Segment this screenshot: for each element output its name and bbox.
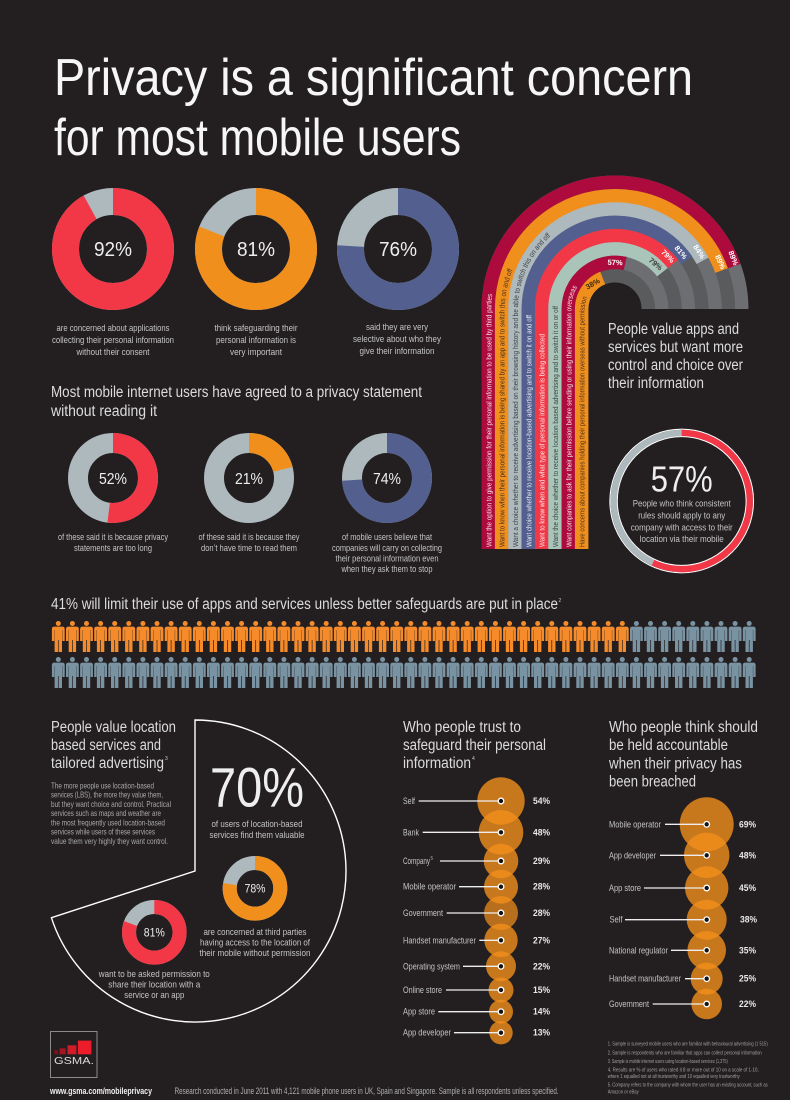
rainbow band labels: Want companies to ask for their permission before sending or using their information overseas — [566, 286, 577, 547]
row: Self: 54% — [533, 796, 550, 807]
rainbow percentages: 89% — [713, 253, 728, 271]
title — [54, 49, 693, 167]
caption: 21%: don’t have time to read them — [201, 543, 297, 554]
caption: 92%: without their consent — [76, 347, 150, 358]
heading: apps and services — [608, 321, 743, 392]
heading: based services and — [51, 737, 161, 754]
heading: 4 — [472, 756, 475, 762]
row: App developer — [403, 1028, 550, 1039]
row: App developer: 13% — [533, 1028, 550, 1039]
row: App store: App store — [609, 883, 641, 894]
ring caption: rules should apply to any — [638, 510, 725, 522]
donut: 81%: 81% — [237, 239, 275, 261]
donut: 74%: 74% — [373, 471, 401, 488]
row: Handset manufacturer — [609, 974, 756, 985]
row: Self — [403, 796, 550, 807]
rainbow percentages: 84% — [691, 243, 707, 261]
donut: 81% — [208, 202, 304, 296]
people row 2 — [52, 657, 756, 688]
row: Handset manufacturer: Handset manufacturer — [609, 974, 681, 985]
body text: services such as maps and weather are — [51, 808, 161, 818]
caption: 78%: are concerned at third parties — [204, 927, 307, 938]
people row 1 — [52, 621, 756, 652]
heading: been breached — [609, 774, 696, 791]
caption: 76%: selective about who they — [353, 334, 441, 345]
caption: 92%: are concerned about applications — [56, 323, 170, 334]
caption: 81%: personal information is — [216, 335, 296, 346]
footnotes: where 1 equalled not at all trustworthy and 10 equalled very trustworthy — [607, 1074, 740, 1080]
row: Online store: 15% — [533, 985, 550, 996]
row: App developer: App developer — [403, 1028, 451, 1039]
row: App store: App store — [403, 1007, 435, 1018]
caption: 81% — [214, 323, 298, 358]
ring caption: location via their mobile — [640, 534, 724, 545]
row: App developer — [609, 850, 756, 861]
row: Self — [610, 915, 757, 926]
donut: 76% — [350, 202, 446, 296]
caption: 81%: share their location with a — [108, 980, 201, 990]
footer: website: www.gsma.com/mobileprivacy — [49, 1086, 152, 1096]
ring caption — [631, 498, 733, 545]
body text — [51, 780, 171, 846]
rainbow coloured bands — [488, 182, 734, 549]
caption: 78%: having access to the location of — [200, 938, 310, 948]
caption: 81%: service or an app — [124, 990, 184, 1001]
row: Operating system: 22% — [533, 961, 550, 972]
caption: 76%: give their information — [360, 346, 434, 357]
bubbles — [477, 777, 525, 1044]
chart: control and choice rainbow — [482, 176, 748, 549]
heading: be held accountable — [609, 737, 728, 754]
heading: safeguard their personal — [403, 737, 546, 754]
rainbow band labels: Want choice whether to receive location-based advertising and to switch it on and off — [526, 315, 533, 547]
rainbow percentages: 89% — [726, 249, 740, 267]
row: Handset manufacturer: Handset manufacturer — [403, 935, 476, 946]
row: Mobile operator: Mobile operator — [403, 882, 456, 893]
caption: 92% — [52, 323, 174, 358]
row: Company — [403, 856, 550, 867]
footnotes: Amazon or eBay — [608, 1090, 639, 1096]
row: App store: 45% — [739, 883, 756, 894]
row: Online store: Online store — [403, 985, 442, 996]
heading: apps and services: control and choice over — [608, 357, 743, 374]
donut: 76%: 76% — [379, 239, 417, 261]
row: Company: 29% — [533, 856, 550, 867]
heading: 41% limit use: 41% will limit their use of apps and services unless better safeguards are put in place — [51, 596, 558, 613]
rainbow base arcs — [488, 182, 742, 309]
footnotes: 3. Sample is mobile internet users using location-based services (1,375) — [608, 1059, 728, 1065]
heading: privacy statement — [50, 384, 423, 420]
heading: privacy statement: without reading it — [50, 403, 158, 420]
row: Mobile operator: 69% — [739, 819, 756, 830]
donut: 74% — [352, 443, 422, 513]
donut: 21% — [214, 443, 284, 513]
row: National regulator: 35% — [739, 945, 756, 956]
row: National regulator: National regulator — [609, 945, 668, 956]
rainbow percentages: 38% — [584, 276, 602, 291]
footer: research note: Research conducted in June 2011 with 4,121 mobile phone users in UK, Spain and Singapore. Sample is all respondents unless specified. — [175, 1086, 559, 1096]
heading: 41% limit use: 2 — [558, 598, 562, 604]
ring caption: People who think consistent — [633, 498, 731, 510]
row: Operating system — [403, 961, 550, 972]
rainbow percentages: 81% — [673, 244, 689, 261]
heading: when their privacy has — [608, 755, 742, 772]
body text: value them very highly they want control. — [51, 836, 168, 846]
caption: 74%: when they ask them to stop — [341, 564, 432, 575]
row: Government — [403, 908, 550, 919]
rainbow percentages — [584, 243, 740, 291]
panel: headline donuts — [52, 202, 446, 358]
row: Mobile operator — [403, 882, 550, 893]
ring caption: company with access to their — [631, 522, 733, 534]
rainbow percentages: 79% — [647, 256, 665, 273]
heading: privacy statement: Most mobile internet users have agreed to a privacy statement — [51, 384, 423, 401]
row: Government: 22% — [739, 999, 756, 1010]
caption: 92%: collecting their personal information — [52, 335, 174, 346]
callout: 57% ring: 57% — [651, 458, 713, 500]
row: Online store — [403, 985, 550, 996]
callout: 57% ring — [610, 429, 754, 573]
heading: Who people trust to — [403, 719, 521, 736]
caption: 81% — [98, 969, 210, 1001]
rainbow band labels: Want a choice whether to receive advertising based on their browsing history and be able to switch this on and off — [512, 232, 550, 547]
bubbles — [680, 797, 734, 1019]
donut: 81% — [129, 907, 180, 958]
row: Mobile operator: Mobile operator — [609, 819, 661, 830]
row: Mobile operator: 28% — [533, 882, 550, 893]
row: Self: Self — [403, 796, 415, 807]
heading: 3 — [165, 756, 168, 762]
title: for most mobile users — [54, 109, 461, 167]
row: App store: 14% — [533, 1007, 550, 1018]
panel: who people trust — [403, 719, 550, 1044]
stat: 70%: services find them valuable — [210, 830, 304, 841]
heading — [608, 719, 758, 791]
heading — [51, 719, 176, 772]
row: Bank — [403, 827, 550, 838]
heading: apps and services: their information — [608, 375, 704, 392]
stat: 70%: 70% — [210, 756, 304, 818]
panel: who is accountable — [608, 719, 758, 1019]
row: App developer: App developer — [609, 850, 656, 861]
row: App store — [403, 1007, 550, 1018]
body text: but they want choice and control. Practical — [51, 799, 171, 809]
caption: 76% — [353, 322, 441, 357]
pie outline: 70% — [51, 720, 346, 1022]
row: Self: 38% — [740, 915, 757, 926]
caption: 74% — [332, 532, 442, 575]
row: Mobile operator — [609, 819, 756, 830]
row: Bank: 48% — [533, 827, 550, 838]
donut: 81%: 81% — [144, 926, 165, 940]
panel: location based services — [51, 719, 346, 1022]
logo: GSMA — [50, 1032, 97, 1078]
heading — [403, 719, 546, 772]
rainbow percentages: 79% — [659, 248, 676, 265]
donut: 92%: 92% — [94, 239, 132, 261]
row: National regulator — [609, 945, 756, 956]
rainbow band labels: Have concerns about companies holding their personal information overseas without permission — [579, 296, 588, 546]
caption: 81%: very important — [230, 347, 282, 358]
row: Company: 5 — [430, 856, 434, 860]
donut: 78% — [230, 863, 280, 914]
body text: services (LBS), the more they value them, — [51, 790, 163, 800]
row: Handset manufacturer: 25% — [739, 974, 756, 985]
rainbow band labels — [486, 232, 588, 547]
rainbow percentages: 57% — [607, 258, 623, 267]
donut: 92% — [66, 202, 160, 296]
footnotes — [607, 1041, 768, 1096]
caption: 74%: of mobile users believe that — [342, 532, 432, 543]
row: Handset manufacturer: 27% — [533, 935, 550, 946]
caption: 52%: statements are too long — [74, 543, 152, 554]
caption: 78% — [200, 927, 310, 959]
caption: 52% — [58, 532, 168, 554]
row: Operating system: Operating system — [403, 961, 460, 972]
caption: 81%: want to be asked permission to — [98, 969, 210, 980]
logo: GSMA: GSMA. — [54, 1056, 94, 1067]
heading: Who people think should — [609, 719, 758, 736]
row: Government: Government — [403, 908, 443, 919]
heading: tailored advertising — [51, 755, 164, 772]
row: Government: 28% — [533, 908, 550, 919]
caption: 81%: think safeguarding their — [214, 323, 298, 334]
row: App store — [609, 883, 756, 894]
stat: 70% — [210, 756, 304, 841]
caption: 21%: of these said it is because they — [198, 532, 300, 543]
body text: The more people use location-based — [51, 780, 154, 790]
body text: the most frequently used location-based — [51, 818, 165, 828]
heading: information — [403, 755, 471, 772]
rainbow band labels: Want the option to give permission for their personal information to be used by third parties — [486, 294, 493, 547]
row: Company: Company — [403, 856, 430, 867]
panel: privacy statement donuts — [58, 443, 442, 575]
stat: 70%: of users of location-based — [212, 819, 302, 830]
heading: People value location — [51, 719, 176, 736]
title: Privacy is a significant concern — [54, 49, 693, 107]
body text: services while users of these services — [51, 827, 155, 837]
caption: 74%: companies will carry on collecting — [332, 543, 442, 554]
donut: 52% — [78, 443, 148, 513]
row: Bank: Bank — [403, 827, 419, 838]
ring — [610, 429, 754, 573]
row: Self: Self — [610, 915, 623, 926]
caption: 74%: their personal information even — [336, 554, 438, 564]
rainbow band labels: Want the choice whether to receive location based advertising and to switch it on or off — [552, 306, 560, 547]
row: Government: Government — [609, 999, 649, 1010]
rainbow band labels: Want to know when and what type of personal information is being collected — [539, 334, 546, 547]
donut: 78%: 78% — [244, 882, 266, 896]
row: App developer: 48% — [739, 850, 756, 861]
donut: 52%: 52% — [99, 471, 127, 488]
row: Handset manufacturer — [403, 935, 550, 946]
row: Government — [609, 999, 756, 1010]
heading: apps and services: services but want more — [608, 339, 743, 356]
caption: 52%: of these said it is because privacy — [58, 532, 168, 543]
rainbow band labels: Want to know when their personal information is being shared by an app and to switch this on and off — [499, 268, 512, 547]
caption: 76%: said they are very — [366, 322, 428, 333]
pictogram: 41 of 100 people — [52, 621, 756, 688]
heading: apps and services: People value apps and — [608, 321, 739, 338]
caption: 78%: their mobile without permission — [200, 948, 310, 959]
donut: 21%: 21% — [235, 471, 263, 488]
caption: 21% — [198, 532, 300, 554]
